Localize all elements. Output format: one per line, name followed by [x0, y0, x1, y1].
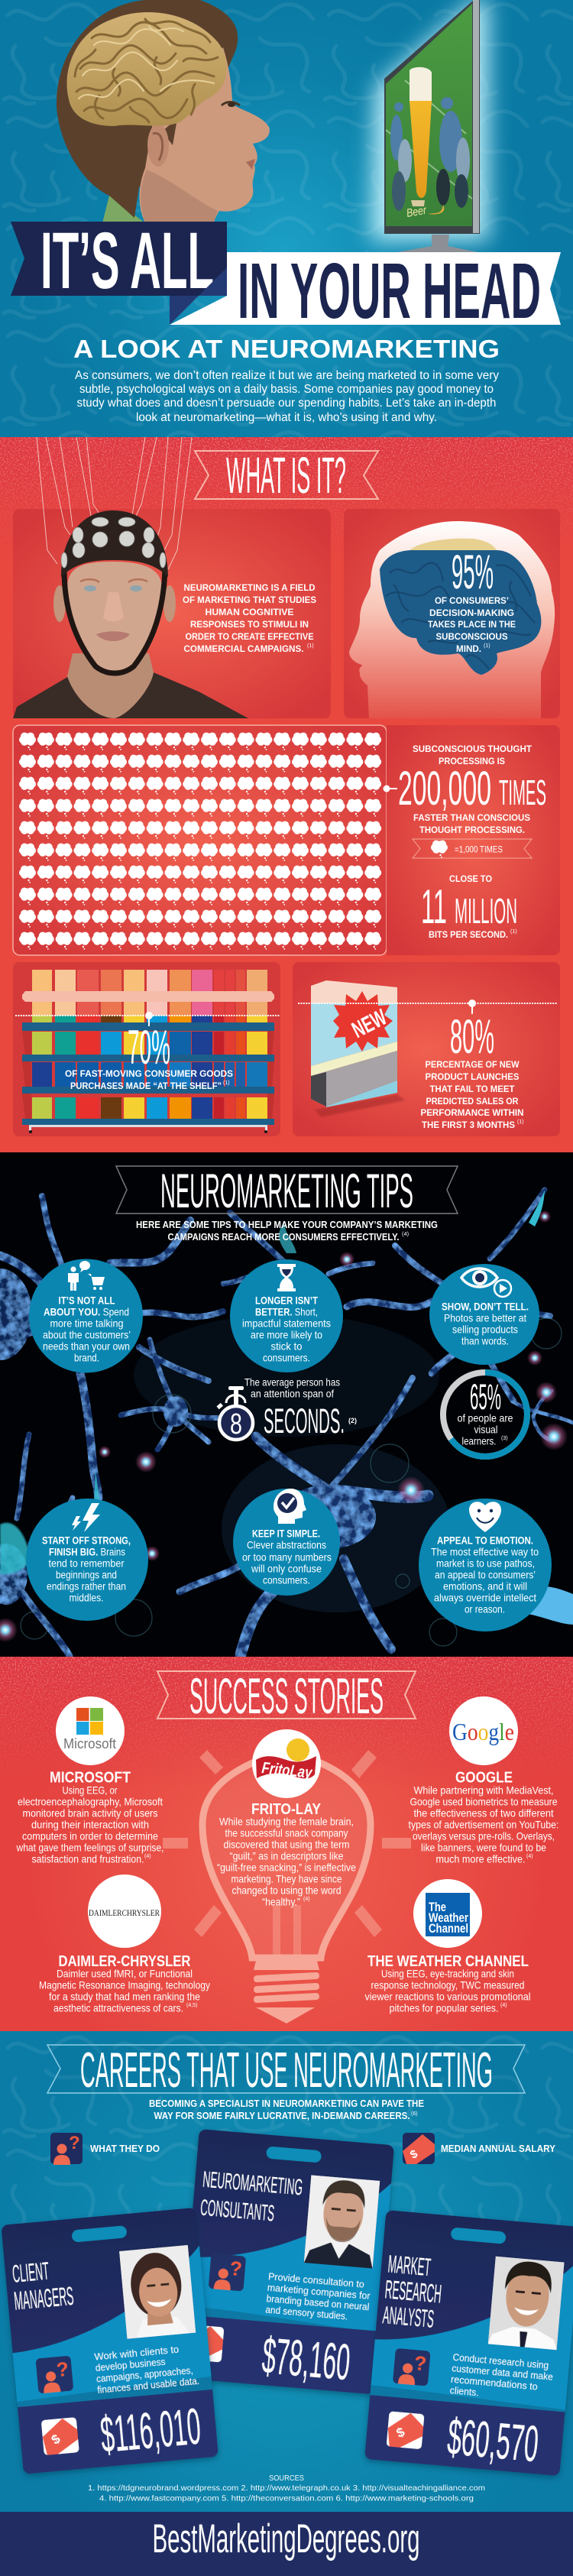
section background: careers — [0, 2031, 573, 2512]
panel: neuromarketing definition — [13, 437, 331, 718]
icon: what they do: ? — [55, 2357, 70, 2381]
tip: start off strong — [26, 1499, 148, 1621]
tip: show, don't tell: than words. — [461, 1334, 509, 1346]
illustration: product box with NEW burst — [311, 980, 405, 1117]
launch caption — [420, 1059, 524, 1130]
definition text: ORDER TO CREATE EFFECTIVE — [185, 631, 313, 642]
tip: start off strong: START OFF STRONG, — [42, 1534, 131, 1547]
story: the weather channel: THE WEATHER CHANNEL — [367, 1953, 529, 1970]
story: microsoft: electroencephalography, Microsoft — [18, 1796, 163, 1808]
definition text: COMMERCIAL CAMPAIGNS. — [183, 643, 304, 654]
intro paragraph: look at neuromarketing—what it is, who’s using it and why. — [136, 411, 437, 424]
stat: 65% visual learners: of people are — [457, 1412, 513, 1424]
tip: keep it simple: consumers. — [263, 1574, 310, 1586]
career card: client managers: $116,010 — [98, 2398, 203, 2464]
bits per second text: 11 — [421, 880, 447, 934]
tip: show, don't tell: SHOW, DON’T TELL. — [442, 1301, 529, 1313]
speed text: 200,000 — [398, 762, 491, 815]
definition text: NEUROMARKETING IS A FIELD — [183, 582, 316, 593]
icon: what they do — [35, 2355, 73, 2393]
career card: market research analysts: Conduct research using — [452, 2351, 549, 2371]
logo: daimlerchrysler: DAIMLERCHRYSLER — [89, 1907, 160, 1918]
bits per second text: CLOSE TO — [449, 873, 492, 884]
stat: 8 second attention span: an attention span of — [251, 1388, 334, 1400]
heading ribbon: neuromarketing tips — [116, 1165, 458, 1218]
panel: thought cloud grid — [13, 725, 387, 955]
story: the weather channel: response technology, TWC measured — [371, 1979, 524, 1991]
stat: 65% visual learners: learners. — [461, 1435, 497, 1447]
career card: neuromarketing consultants: branding based on neural — [266, 2292, 370, 2312]
section background: header — [0, 0, 573, 437]
legend: what they do: WHAT THEY DO — [90, 2143, 160, 2154]
launch caption: PREDICTED SALES OR — [426, 1096, 519, 1107]
logo: frito-lay: FritoLay — [261, 1759, 314, 1782]
tip: keep it simple: Clever abstractions — [247, 1539, 326, 1551]
story: microsoft: Microsoft — [63, 1736, 116, 1751]
marker: dotted line — [15, 1012, 280, 1026]
stat: 8 second attention span: The average person has — [244, 1375, 340, 1388]
story: daimler-chrysler: for a study that had men ranking the — [49, 1990, 200, 2002]
story: daimler-chrysler — [39, 1874, 210, 2014]
subtitle: A LOOK AT NEUROMARKETING — [73, 335, 500, 364]
logo: the weather channel: Channel — [429, 1922, 468, 1936]
career card: neuromarketing consultants: and sensory studies. — [265, 2304, 348, 2322]
story: the weather channel — [365, 1879, 530, 2014]
icon: stopwatch — [216, 1386, 253, 1440]
story: microsoft: what gave them feelings of surprise, — [16, 1842, 164, 1854]
story: the weather channel: (4) — [500, 2003, 507, 2008]
tip: start off strong: endings rather than — [47, 1580, 126, 1593]
tip: longer isn't better — [230, 1259, 343, 1372]
intro paragraph: As consumers, we don’t often realize it but we are being marketed to in some very — [75, 369, 499, 382]
launch caption: THE FIRST 3 MONTHS — [422, 1120, 515, 1130]
logo: microsoft — [76, 1708, 103, 1735]
brain caption: SUBCONSCIOUS — [435, 631, 507, 642]
tip: appeal to emotion: emotions, and it will — [443, 1580, 527, 1593]
stat: 65% visual learners: (3) — [501, 1436, 508, 1441]
tip: keep it simple: will only confuse — [251, 1562, 322, 1574]
career card: market research analysts: ANALYSTS — [382, 2301, 435, 2333]
section background: tips with neurons — [0, 1152, 573, 1657]
tip: keep it simple — [233, 1489, 340, 1596]
icon: what they do: ? — [229, 2257, 243, 2280]
tip: it's not all about you: needs than your own — [43, 1340, 130, 1353]
icon: salary tag — [41, 2417, 79, 2455]
heading ribbon: what is it — [195, 447, 378, 504]
shelf caption: PURCHASES MADE “AT THE SHELF” — [70, 1081, 222, 1091]
photo: male consultant — [304, 2175, 380, 2269]
tip: keep it simple: or too many numbers — [242, 1551, 332, 1563]
story: the weather channel: pitches for popular series. — [390, 2002, 498, 2014]
story: frito-lay: the successful snack company — [225, 1826, 348, 1839]
story: frito-lay: “healthy.” — [262, 1895, 300, 1907]
career card: market research analysts — [364, 2210, 573, 2476]
section background: what is it — [0, 437, 573, 1152]
bits per second text: (1) — [510, 929, 517, 935]
tips intro text: CAMPAIGNS REACH MORE CONSUMERS EFFECTIVELY. — [168, 1231, 399, 1243]
illustration: man with exposed brain — [57, 0, 270, 223]
tip: appeal to emotion: or reason. — [465, 1603, 505, 1615]
tip: it's not all about you: more time talking — [50, 1317, 124, 1330]
tips intro text — [136, 1219, 438, 1243]
story: daimler-chrysler: (4,5) — [186, 2003, 197, 2008]
story: frito-lay: marketing. They have since — [231, 1872, 342, 1884]
tips intro text: (4) — [402, 1230, 410, 1237]
tip: appeal to emotion: an appeal to consumers’ — [435, 1568, 536, 1580]
career card: market research analysts: customer data and make — [452, 2362, 554, 2383]
tips intro text: HERE ARE SOME TIPS TO HELP MAKE YOUR COMPANY’S MARKETING — [136, 1219, 438, 1230]
career card: neuromarketing consultants — [179, 2129, 394, 2394]
intro paragraph: subtle, psychological ways on a daily basis. Some companies pay good money to — [79, 383, 494, 396]
speed text: PROCESSING IS — [439, 756, 505, 766]
careers intro text: (6) — [411, 2111, 418, 2117]
story: google: (4) — [526, 1854, 533, 1859]
career card: market research analysts: clients. — [449, 2384, 479, 2398]
legend: median annual salary: MEDIAN ANNUAL SALARY — [441, 2143, 556, 2154]
brain caption: TAKES PLACE IN THE — [428, 619, 516, 630]
legend ribbon — [413, 839, 532, 858]
title banner: IT'S ALL: IT’S ALL — [40, 216, 214, 306]
career card: neuromarketing consultants: Provide consultation to — [268, 2270, 364, 2290]
tip: start off strong: tend to remember — [49, 1557, 125, 1570]
speed text: THOUGHT PROCESSING. — [419, 825, 525, 835]
tip: keep it simple: KEEP IT SIMPLE. — [252, 1527, 320, 1539]
panel: processing speed stats — [384, 725, 560, 955]
career card: neuromarketing consultants: NEUROMARKETING — [202, 2167, 303, 2201]
intro paragraph: study what does and doesn’t persuade our spending habits. Let’s take an in-depth — [76, 397, 497, 410]
definition text: OF MARKETING THAT STUDIES — [183, 595, 316, 605]
icon: what they do: ? — [413, 2351, 427, 2375]
heading ribbon: success stories — [157, 1667, 416, 1724]
illustration: television with beer ad: Beer — [406, 204, 428, 220]
tip: longer isn't better: BETTER. Short, — [255, 1305, 318, 1317]
panel: new product launches: 80% — [450, 1010, 494, 1064]
legend: median annual salary — [403, 2133, 556, 2164]
title banner: IT'S ALL — [11, 216, 227, 306]
career card: client managers — [1, 2208, 219, 2474]
shelf caption: (1) — [223, 1081, 230, 1086]
launch caption: PERCENTAGE OF NEW — [425, 1059, 520, 1070]
illustration: store shelves — [22, 970, 274, 1133]
story: google: While partnering with MediaVest, — [414, 1784, 553, 1796]
icon: salary tag — [387, 2411, 424, 2449]
icon: light bulb — [163, 1750, 411, 2024]
sources — [88, 2474, 485, 2503]
icon: person, speech bubble and cart — [68, 1261, 105, 1291]
career card: client managers: CLIENT — [11, 2257, 50, 2288]
icon: salary tag: $ — [194, 2338, 207, 2354]
story: microsoft: monitored brain activity of users — [23, 1806, 157, 1819]
story: frito-lay: changed to using the word — [232, 1884, 341, 1897]
career card: neuromarketing consultants: CONSULTANTS — [199, 2195, 275, 2227]
definition text: RESPONSES TO STIMULI IN — [190, 619, 309, 630]
career card: client managers: campaigns, approaches, — [96, 2364, 193, 2384]
story: daimler-chrysler: Daimler used fMRI, or Functional — [57, 1967, 193, 1979]
brain caption: DECISION-MAKING — [429, 608, 514, 618]
story: microsoft: computers in order to determine — [22, 1829, 158, 1842]
brain caption: (1) — [484, 643, 490, 649]
tip: appeal to emotion — [419, 1499, 552, 1631]
icon: hourglass — [277, 1264, 296, 1291]
launch caption: (1) — [517, 1120, 524, 1125]
story: microsoft — [16, 1696, 164, 1865]
illustration: man wearing EEG cap — [13, 437, 248, 718]
story: microsoft: (4) — [144, 1854, 151, 1859]
definition text: (1) — [307, 643, 314, 649]
tip: longer isn't better: impactful statements — [242, 1317, 331, 1330]
definition text: HUMAN COGNITIVE — [205, 607, 293, 617]
tip: longer isn't better: consumers. — [263, 1351, 310, 1363]
shelf caption — [65, 1068, 233, 1091]
career card: client managers: finances and usable data. — [97, 2375, 200, 2396]
legend: what they do: ? — [69, 2133, 80, 2153]
intro paragraph — [75, 369, 499, 424]
story: microsoft: satisfaction and frustration. — [32, 1852, 144, 1865]
tip: longer isn't better: stick to — [270, 1340, 303, 1353]
icon: head with check mark — [274, 1489, 306, 1524]
tip: it's not all about you — [29, 1259, 143, 1372]
section background: success stories — [0, 1657, 573, 2031]
tip: show, don't tell: selling products — [452, 1324, 518, 1336]
connector dot — [384, 786, 397, 792]
stat: 65% visual learners — [443, 1372, 527, 1456]
launch caption: PERFORMANCE WITHIN — [420, 1107, 524, 1118]
panel: shelf purchases: 70% — [128, 1021, 170, 1074]
careers intro text: WAY FOR SOME FAIRLY LUCRATIVE, IN-DEMAND CAREERS. — [154, 2111, 410, 2121]
story: frito-lay: “guilt-free snacking,” is ineffective — [217, 1862, 356, 1874]
story: google: much more effective. — [435, 1852, 526, 1865]
story: daimler-chrysler: DAIMLER-CHRYSLER — [58, 1953, 191, 1970]
stat: 65% visual learners: 65% — [470, 1376, 501, 1417]
shelf caption: OF FAST-MOVING CONSUMER GOODS — [65, 1068, 233, 1079]
logo: the weather channel: Weather — [429, 1911, 468, 1925]
story: frito-lay: While studying the female brain, — [219, 1816, 354, 1828]
story: daimler-chrysler: aesthetic attractiveness of cars. — [53, 2002, 183, 2014]
brain caption: OF CONSUMERS’ — [435, 595, 509, 606]
story: microsoft: Using EEG, or — [63, 1784, 118, 1796]
speed text — [398, 744, 546, 835]
story: google: GOOGLE — [455, 1770, 513, 1787]
icon: head silhouette — [349, 521, 555, 718]
story: frito-lay: (4) — [303, 1897, 310, 1902]
icon: what they do — [209, 2254, 246, 2292]
career card: client managers: develop business — [95, 2356, 167, 2373]
story: the weather channel: Using EEG, eye-tracking and skin — [381, 1967, 514, 1979]
icon: salary tag: $ — [49, 2431, 63, 2448]
tip: appeal to emotion: market is to use pathos, — [436, 1557, 535, 1570]
logo: google: Google — [452, 1718, 514, 1745]
tip: it's not all about you: about the customers’ — [43, 1328, 131, 1340]
stat: 8 second attention span: (2) — [348, 1417, 357, 1424]
panel: shelf purchases — [13, 962, 280, 1136]
photo: male analyst — [488, 2257, 565, 2350]
marker: dotted line — [298, 1000, 557, 1014]
story: frito-lay: “guilt,” as in descriptors like — [229, 1849, 344, 1862]
story: google: like banners, were found to be — [421, 1842, 546, 1854]
story: frito-lay — [217, 1729, 356, 1907]
icon: blue brain — [380, 539, 541, 675]
brain caption: MIND. — [456, 643, 481, 654]
story: daimler-chrysler: Magnetic Resonance Imaging, technology — [39, 1979, 210, 1991]
icon: salary tag: $ — [394, 2424, 407, 2441]
sources: 4. http://www.fastcompany.com 5. http://theconversation.com 6. http://www.marketing-schools.org — [99, 2494, 474, 2503]
tip: start off strong: middles. — [69, 1591, 104, 1603]
icon: lightning bolts — [72, 1503, 100, 1532]
careers intro text — [149, 2098, 424, 2121]
logo: the weather channel: The — [429, 1900, 446, 1914]
panel: new product launches — [293, 962, 560, 1136]
story: frito-lay: discovered that using the term — [223, 1839, 350, 1851]
tip: it's not all about you: ABOUT YOU. Spend — [44, 1305, 129, 1317]
story: microsoft: MICROSOFT — [50, 1770, 131, 1787]
career card: market research analysts: RESEARCH — [384, 2275, 442, 2309]
tip: appeal to emotion: always override intellect — [434, 1591, 536, 1603]
stat: 8 second attention span — [216, 1375, 357, 1440]
story: the weather channel: viewer reactions to various promotional — [365, 1990, 530, 2002]
sources: SOURCES — [269, 2474, 304, 2483]
speed text: FASTER THAN CONSCIOUS — [413, 812, 530, 823]
stat: 65% visual learners: visual — [474, 1423, 498, 1435]
tip: appeal to emotion: APPEAL TO EMOTION. — [437, 1534, 533, 1547]
panel: 95 percent subconscious: 95% — [452, 546, 494, 599]
sources: 1. https://tdgneurobrand.wordpress.com 2. http://www.telegraph.co.uk 3. http://visualteachingalliance.com — [88, 2484, 485, 2493]
tip: it's not all about you: IT’S NOT ALL — [58, 1294, 115, 1307]
tip: show, don't tell: Photos are better at — [444, 1311, 526, 1324]
icon: salary tag — [186, 2325, 224, 2362]
illustration: product box with NEW burst: NEW — [348, 1005, 391, 1043]
tip: it's not all about you: brand. — [74, 1351, 99, 1363]
icon: stopwatch: 8 — [230, 1408, 242, 1440]
definition text — [183, 582, 316, 654]
icon: what they do — [393, 2348, 431, 2386]
story: google: the effectiveness of two different — [414, 1806, 554, 1819]
career card: market research analysts: recommendations to — [450, 2373, 538, 2393]
tip: start off strong: FINISH BIG. Brains — [49, 1545, 125, 1557]
photo: female manager — [119, 2245, 196, 2339]
tip: appeal to emotion: The most effective way to — [431, 1545, 539, 1557]
tip: start off strong: beginnings and — [56, 1568, 117, 1580]
career card: neuromarketing consultants: marketing companies for — [267, 2282, 371, 2302]
stat: 8 second attention span: SECONDS. — [264, 1401, 345, 1440]
legend ribbon: =1,000 TIMES — [455, 844, 503, 854]
career card: client managers: MANAGERS — [13, 2282, 75, 2316]
brain caption — [428, 595, 516, 654]
career card: neuromarketing consultants: $78,160 — [260, 2327, 352, 2391]
speed text: SUBCONSCIOUS THOUGHT — [413, 744, 533, 754]
icon: eye with play button — [461, 1269, 511, 1297]
careers intro text: BECOMING A SPECIALIST IN NEUROMARKETING CAN PAVE THE — [149, 2098, 424, 2109]
career card: market research analysts: MARKET — [387, 2250, 432, 2281]
panel: 95 percent subconscious — [344, 509, 560, 718]
tip: longer isn't better: are more likely to — [251, 1328, 322, 1340]
launch caption: PRODUCT LAUNCHES — [425, 1071, 520, 1082]
logo: the weather channel — [426, 1893, 470, 1936]
logo: frito-lay — [256, 1738, 316, 1782]
legend: what they do — [50, 2133, 160, 2165]
icon: smiling heart — [469, 1502, 501, 1532]
illustration: television with beer ad — [371, 0, 489, 252]
heading ribbon: what is it: WHAT IS IT? — [226, 447, 346, 504]
bits per second text: BITS PER SECOND. — [429, 929, 508, 940]
tip: longer isn't better: LONGER ISN’T — [255, 1294, 318, 1307]
story: frito-lay: FRITO-LAY — [251, 1801, 322, 1818]
story: google — [408, 1696, 559, 1865]
legend: median annual salary: $ — [408, 2147, 420, 2162]
career card: client managers: Work with clients to — [94, 2344, 180, 2363]
bits per second text — [421, 873, 517, 940]
story: microsoft: during their interaction with — [31, 1819, 149, 1831]
tip: show, don't tell — [429, 1264, 539, 1365]
footer — [0, 2512, 573, 2576]
launch caption: THAT FAIL TO MEET — [429, 1084, 515, 1094]
